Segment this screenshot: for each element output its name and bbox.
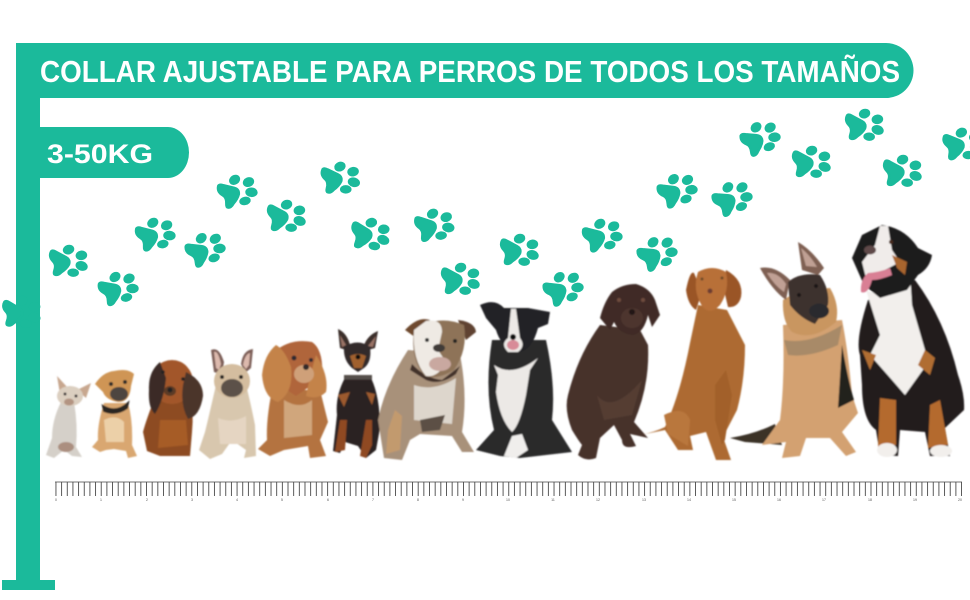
measuring ruler: 6 [327,498,329,502]
icon: paw 6 [263,193,311,239]
icon: paw 12 [543,268,585,306]
measuring ruler [55,482,962,502]
icon: paw 10 [437,256,485,302]
dog: dachshund [143,360,203,456]
icon: paw on pole [0,288,47,335]
row of dogs [46,225,964,460]
icon: paw 15 [657,171,699,208]
icon: paw 5 [217,172,259,209]
dog: chihuahua [46,376,91,458]
measuring ruler: 9 [462,498,464,502]
dog: bernese mountain dog [852,225,964,457]
dog: english bulldog [378,319,476,460]
measuring ruler: 19 [913,498,917,502]
icon: paw 1 [45,238,93,284]
dog: chocolate labrador [567,284,660,459]
measuring ruler: 5 [281,498,283,502]
icon: paw 2 [99,270,139,305]
dog: puppy [92,370,137,458]
dog: german shepherd [730,242,858,458]
measuring ruler: 17 [822,498,826,502]
title: COLLAR AJUSTABLE PARA PERROS DE TODOS LOS TAMAÑOS [40,54,900,89]
icon: paw 8 [346,210,396,258]
measuring ruler: 12 [596,498,600,502]
measuring ruler: 14 [687,498,691,502]
icon: paw 16 [711,178,754,217]
measuring ruler: 20 [958,498,962,502]
icon: paw 18 [788,139,836,185]
icon: paw 19 [841,102,889,148]
dog: border collie [476,302,572,458]
measuring ruler: 10 [506,498,510,502]
measuring ruler: 3 [191,498,193,502]
icon: paw 4 [185,229,227,267]
measuring ruler: 11 [551,498,555,502]
measuring ruler: 8 [417,498,419,502]
measuring ruler: 4 [236,498,238,502]
measuring ruler: 18 [868,498,872,502]
measuring ruler: 15 [732,498,736,502]
measuring ruler: 0 [55,498,57,502]
weight range label: 3-50KG [47,139,153,169]
dog: vizsla [640,268,745,460]
measuring ruler: 1 [100,498,102,502]
icon: paw 9 [413,204,457,245]
measuring ruler: 7 [372,498,374,502]
measuring ruler: 13 [642,498,646,502]
dog: miniature pinscher [333,329,380,458]
icon: paw 11 [496,227,544,273]
icon: paw 20 [879,148,927,194]
icon: paw 14 [636,233,679,272]
icon: paw 7 [317,155,365,200]
dog: french bulldog [199,349,256,459]
paw print trail [0,102,970,335]
icon: paw 3 [135,214,177,252]
dog: cavalier spaniel [258,341,328,458]
icon: paw 13 [582,215,624,253]
measuring ruler: 16 [777,498,781,502]
measuring ruler: 2 [146,498,148,502]
icon: paw 21 [940,122,970,165]
icon: paw 17 [739,118,782,157]
